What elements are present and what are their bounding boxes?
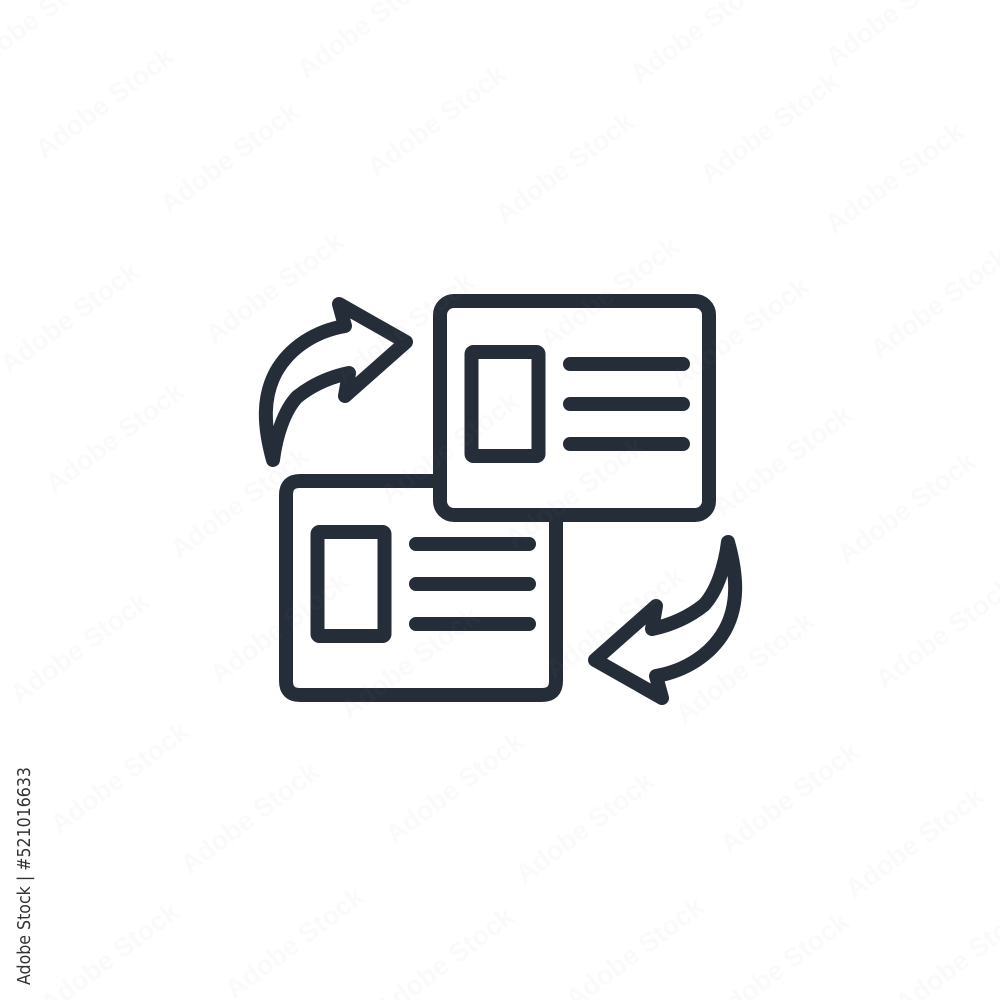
watermark pattern: Adobe Stock: [715, 736, 865, 859]
front card text lines: [570, 364, 683, 444]
watermark pattern: Adobe Stock: [708, 399, 858, 522]
watermark pattern: Adobe Stock: [30, 41, 180, 164]
watermark pattern: Adobe Stock: [820, 116, 970, 239]
watermark pattern: Adobe Stock: [540, 561, 690, 684]
watermark pattern: Adobe Stock: [535, 231, 685, 354]
back card (lower left): [286, 481, 556, 695]
watermark pattern: Adobe Stock: [45, 716, 195, 839]
watermark pattern: Adobe Stock: [375, 386, 525, 509]
watermark pattern: Adobe Stock: [510, 766, 660, 889]
watermark pattern: Adobe Stock: [695, 66, 845, 189]
watermark pattern: Adobe Stock: [832, 446, 982, 569]
back card photo placeholder: [318, 532, 384, 636]
front card (upper right): [440, 301, 709, 515]
back card text lines: [416, 544, 529, 624]
watermark pattern: Adobe Stock: [380, 726, 530, 849]
arrow: bottom right pointing left: [595, 542, 735, 698]
icon: two exchanging cards with arrows: [266, 301, 735, 698]
watermark pattern: Adobe Stock: [665, 271, 815, 394]
watermark pattern: Adobe Stock: [670, 606, 820, 729]
watermark pattern: Adobe Stock: [362, 59, 512, 182]
watermark pattern: Adobe Stock: [200, 226, 350, 349]
watermark pattern: Adobe Stock: [175, 756, 325, 879]
watermark pattern: Adobe Stock: [840, 781, 990, 904]
watermark pattern: Adobe Stock: [165, 441, 315, 564]
watermark pattern: Adobe Stock: [40, 376, 190, 499]
watermark pattern: Adobe Stock: [330, 266, 480, 389]
watermark pattern: Adobe Stock: [155, 96, 305, 219]
watermark pattern: Adobe Stock: [335, 601, 485, 724]
watermark pattern: Adobe Stock: [205, 566, 355, 689]
watermark pattern: Adobe Stock: [5, 586, 155, 709]
watermark pattern: Adobe Stock: [500, 431, 650, 554]
stock credit label: Adobe Stock | #521016633: [14, 767, 35, 985]
watermark pattern: Adobe Stock: [490, 106, 640, 229]
front card photo placeholder: [472, 352, 538, 456]
arrow: top left pointing right: [266, 304, 406, 460]
